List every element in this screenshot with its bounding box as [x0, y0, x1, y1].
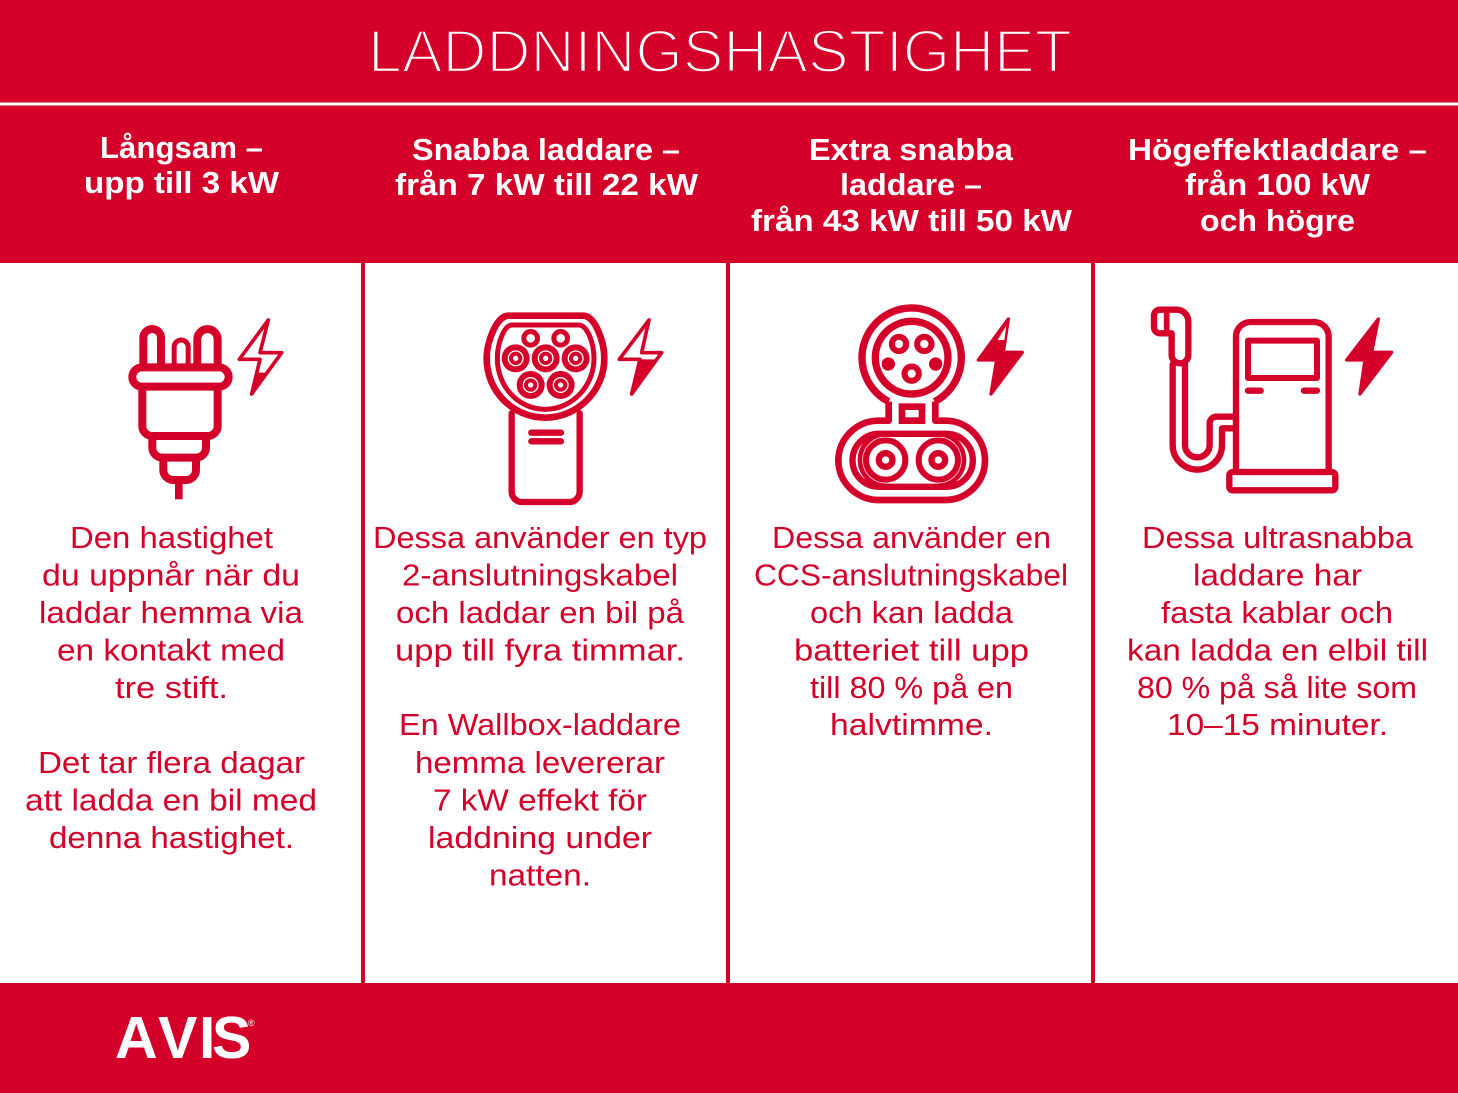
text: extra snabba laddare description: batteriet till upp	[794, 632, 1029, 668]
text: långsam description: tre stift.	[115, 670, 228, 705]
text: högeffektladdare description: 80 % på så lite som	[1137, 670, 1417, 705]
text: extra snabba laddare description: till 80 % på en	[810, 670, 1013, 705]
panel: högeffektladdare	[1127, 132, 1428, 742]
text: långsam description: Det tar flera dagar	[38, 745, 305, 780]
heading: högeffektladdare: Högeffektladdare –	[1128, 132, 1427, 167]
heading: snabba laddare: Snabba laddare –	[412, 132, 680, 167]
icon: plug	[132, 320, 282, 499]
text: snabba laddare description: hemma levererar	[415, 745, 665, 780]
heading: högeffektladdare	[1128, 132, 1427, 238]
text: snabba laddare description: och laddar en bil på	[396, 595, 685, 630]
heading: långsam: Långsam –	[100, 130, 263, 165]
panel: långsam	[25, 130, 317, 855]
heading: högeffektladdare: och högre	[1200, 203, 1355, 238]
text: snabba laddare description: laddning under	[428, 820, 652, 855]
text: långsam description	[25, 520, 317, 855]
text: högeffektladdare description: kan ladda en elbil till	[1127, 632, 1428, 668]
icon: type 2 connector	[487, 316, 662, 502]
text: extra snabba laddare description: Dessa använder en	[772, 520, 1051, 555]
text: långsam description: laddar hemma via	[39, 595, 304, 630]
text: långsam description: denna hastighet.	[49, 820, 294, 855]
text: extra snabba laddare description: halvtimme.	[830, 707, 993, 742]
heading: långsam	[84, 130, 280, 200]
text: snabba laddare description: En Wallbox-laddare	[399, 707, 681, 742]
text: långsam description: att ladda en bil med	[25, 782, 317, 818]
text: snabba laddare description: upp till fyra timmar.	[395, 632, 685, 668]
icon: CCS connector	[838, 308, 1022, 500]
heading: extra snabba laddare: från 43 kW till 50 kW	[751, 203, 1073, 238]
panel: extra snabba laddare	[751, 132, 1073, 742]
text: snabba laddare description: natten.	[489, 858, 591, 892]
heading: snabba laddare: från 7 kW till 22 kW	[395, 167, 699, 202]
heading: långsam: upp till 3 kW	[84, 165, 280, 200]
text: extra snabba laddare description	[754, 520, 1068, 742]
heading: snabba laddare	[395, 132, 699, 202]
text: högeffektladdare description: Dessa ultrasnabba	[1142, 520, 1414, 555]
text: långsam description: du uppnår när du	[42, 558, 300, 592]
panel: snabba laddare	[373, 132, 707, 892]
heading: extra snabba laddare: laddare –	[840, 167, 982, 202]
heading: extra snabba laddare: Extra snabba	[809, 132, 1014, 167]
icon: charging station	[1154, 310, 1392, 490]
logo: AVIS: ®	[248, 1018, 255, 1028]
heading: högeffektladdare: från 100 kW	[1185, 167, 1371, 202]
text: högeffektladdare description	[1127, 520, 1428, 742]
logo: AVIS: AVIS	[115, 1005, 251, 1071]
text: snabba laddare description: 2-anslutningskabel	[402, 558, 678, 592]
text: extra snabba laddare description: och kan ladda	[810, 595, 1014, 630]
text: långsam description: en kontakt med	[57, 632, 285, 668]
text: högeffektladdare description: 10–15 minuter.	[1167, 707, 1388, 742]
text: snabba laddare description: 7 kW effekt för	[433, 782, 647, 818]
heading: extra snabba laddare	[751, 132, 1073, 238]
text: högeffektladdare description: laddare har	[1193, 558, 1362, 592]
text: snabba laddare description	[373, 520, 707, 892]
title: LADDNINGSHASTIGHET	[368, 18, 1072, 85]
text: långsam description: Den hastighet	[70, 520, 273, 555]
text: snabba laddare description: Dessa använder en typ	[373, 520, 707, 555]
text: högeffektladdare description: fasta kablar och	[1161, 595, 1393, 630]
text: extra snabba laddare description: CCS-anslutningskabel	[754, 558, 1068, 592]
